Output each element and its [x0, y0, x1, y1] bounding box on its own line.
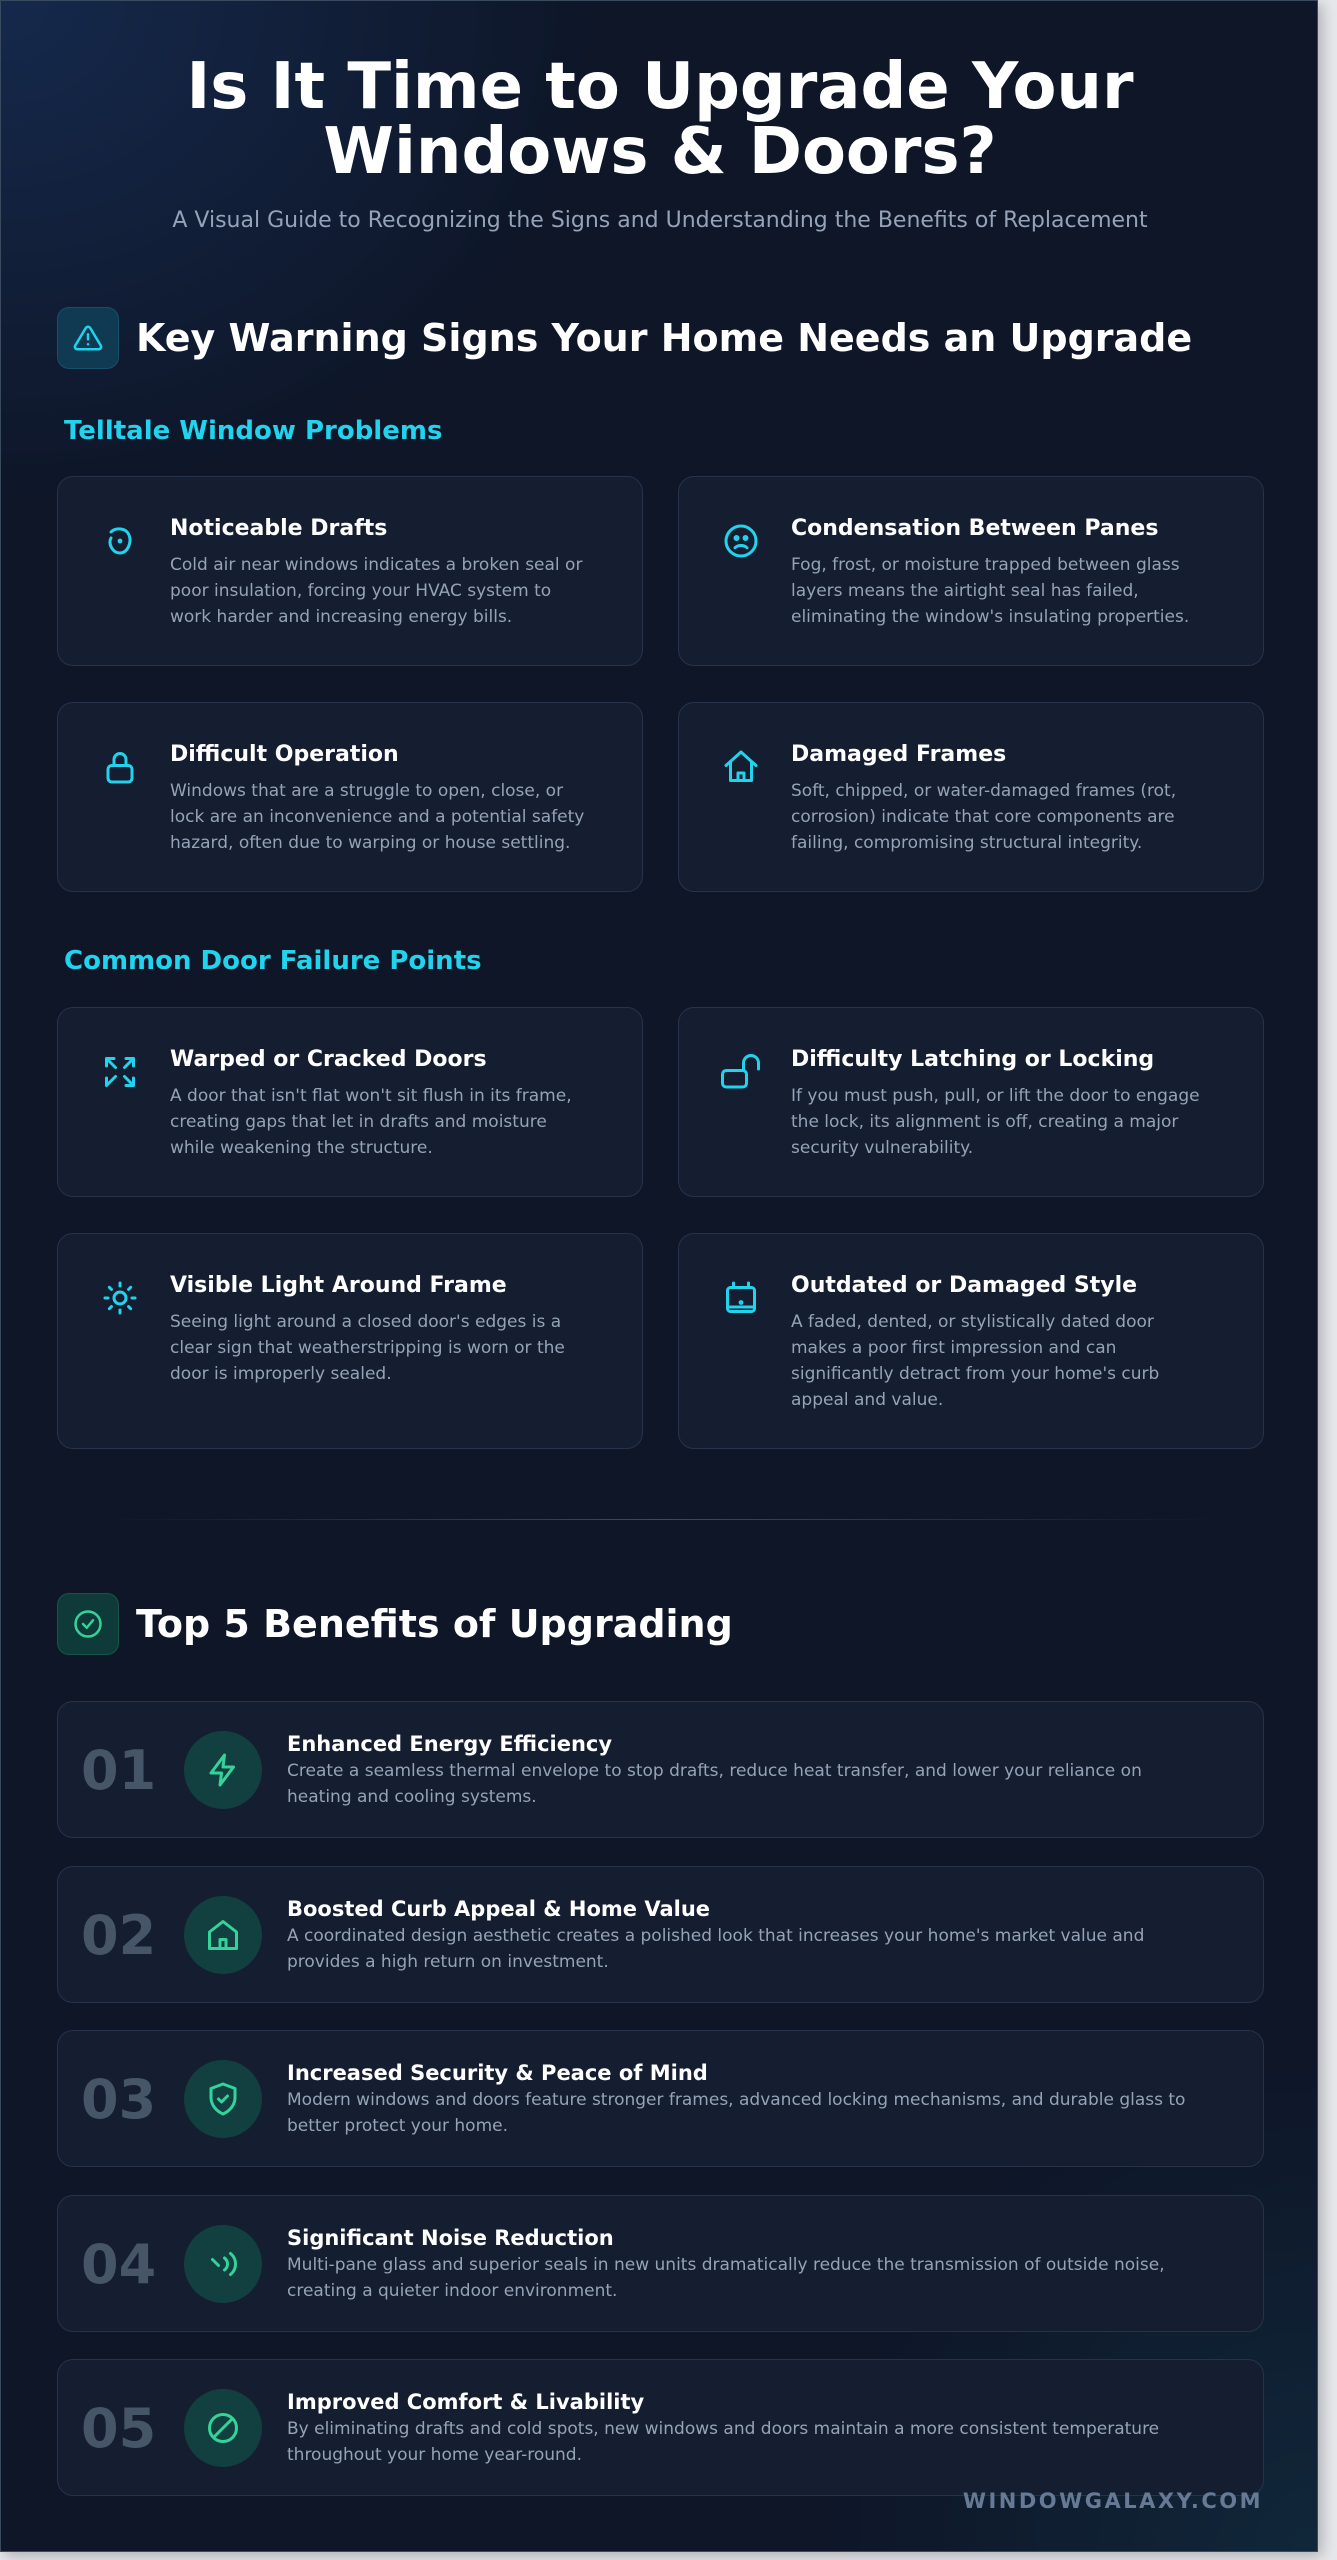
- benefit 5: [57, 2359, 1264, 2496]
- card: outdated style: [678, 1233, 1264, 1449]
- card: condensation: eliminating the window's insulating properties.: [791, 607, 1189, 627]
- card: outdated style: Outdated or Damaged Style: [791, 1273, 1137, 1298]
- card: drafts: poor insulation, forcing your HVAC system to: [170, 581, 551, 601]
- card: warped doors: [57, 1007, 643, 1197]
- benefit 4: [57, 2195, 1264, 2332]
- card: damaged frames: Damaged Frames: [791, 742, 1006, 767]
- card: light around frame: door is improperly sealed.: [170, 1364, 392, 1384]
- card: condensation: [678, 476, 1264, 666]
- card: damaged frames: [678, 702, 1264, 892]
- icon: shield: [184, 2060, 262, 2138]
- card: latching: the lock, its alignment is off, creating a major: [791, 1112, 1178, 1132]
- card: warped doors: creating gaps that let in drafts and moisture: [170, 1112, 547, 1132]
- card: latching: [678, 1007, 1264, 1197]
- benefit 5: Improved Comfort & Livability: [287, 2390, 644, 2414]
- icon: warning header: [57, 307, 119, 369]
- subtitle: A Visual Guide to Recognizing the Signs and Understanding the Benefits of Replacement: [172, 208, 1148, 233]
- title: Windows & Doors?: [323, 115, 997, 189]
- benefit 4: Multi-pane glass and superior seals in new units dramatically reduce the transmission of outside noise, creating a quieter indoor environment.: [287, 2255, 1165, 2301]
- card: condensation: Fog, frost, or moisture trapped between glass: [791, 555, 1180, 575]
- heading: benefits: Top 5 Benefits of Upgrading: [136, 1602, 733, 1646]
- icon: home: [184, 1896, 262, 1974]
- card: difficult operation: hazard, often due to warping or house settling.: [170, 833, 570, 853]
- benefit 3: 03: [81, 2068, 156, 2131]
- card: condensation: layers means the airtight seal has failed,: [791, 581, 1139, 601]
- card: damaged frames: failing, compromising structural integrity.: [791, 833, 1142, 853]
- benefit 1: Enhanced Energy Efficiency: [287, 1732, 612, 1756]
- benefit 3: Modern windows and doors feature stronger frames, advanced locking mechanisms, and durable glass to better protect your home.: [287, 2090, 1185, 2136]
- title: Is It Time to Upgrade Your: [186, 50, 1134, 124]
- watermark: WINDOWGALAXY.COM: [963, 2489, 1263, 2513]
- card: drafts: Noticeable Drafts: [170, 516, 387, 541]
- icon: open lock: [721, 1054, 760, 1088]
- subheading: window problems: Telltale Window Problems: [64, 416, 442, 446]
- card: warped doors: A door that isn't flat won't sit flush in its frame,: [170, 1086, 572, 1106]
- icon: lock: [106, 752, 134, 784]
- card: outdated style: makes a poor first impression and can: [791, 1338, 1116, 1358]
- icon: door panel: [726, 1282, 756, 1313]
- benefit 2: [57, 1866, 1264, 2003]
- heading: warning signs: Key Warning Signs Your Home Needs an Upgrade: [136, 316, 1192, 360]
- card: outdated style: significantly detract from your home's curb: [791, 1364, 1159, 1384]
- card: drafts: [57, 476, 643, 666]
- benefit 5: By eliminating drafts and cold spots, new windows and doors maintain a more consistent temperature throughout your home year-round.: [287, 2419, 1159, 2465]
- card: light around frame: [57, 1233, 643, 1449]
- icon: house: [724, 750, 758, 782]
- benefit 4: Significant Noise Reduction: [287, 2226, 614, 2250]
- benefit 1: [57, 1701, 1264, 1838]
- card: warped doors: while weakening the structure.: [170, 1138, 433, 1158]
- card: damaged frames: Soft, chipped, or water-damaged frames (rot,: [791, 781, 1176, 801]
- card: outdated style: A faded, dented, or stylistically dated door: [791, 1312, 1154, 1332]
- card: light around frame: clear sign that weatherstripping is worn or the: [170, 1338, 565, 1358]
- card: warped doors: Warped or Cracked Doors: [170, 1047, 487, 1072]
- icon: warp arrows: [104, 1056, 136, 1088]
- card: difficult operation: Difficult Operation: [170, 742, 399, 767]
- benefit 1: 01: [81, 1739, 156, 1802]
- card: light around frame: Seeing light around a closed door's edges is a: [170, 1312, 561, 1332]
- card: condensation: Condensation Between Panes: [791, 516, 1158, 541]
- benefit 4: 04: [81, 2233, 156, 2296]
- benefit 3: Increased Security & Peace of Mind: [287, 2061, 708, 2085]
- benefit 2: Boosted Curb Appeal & Home Value: [287, 1897, 710, 1921]
- icon: zap: [184, 1731, 262, 1809]
- card: latching: If you must push, pull, or lift the door to engage: [791, 1086, 1200, 1106]
- card: latching: security vulnerability.: [791, 1138, 973, 1158]
- benefit 1: Create a seamless thermal envelope to stop drafts, reduce heat transfer, and lower your reliance on heating and cooling systems.: [287, 1761, 1142, 1807]
- icon: noise: [184, 2225, 262, 2303]
- icon: sun: [104, 1282, 136, 1314]
- benefit 2: 02: [81, 1904, 156, 1967]
- card: difficult operation: [57, 702, 643, 892]
- card: outdated style: appeal and value.: [791, 1390, 943, 1410]
- benefit 2: A coordinated design aesthetic creates a polished look that increases your home's market value and provides a high return on investment.: [287, 1926, 1144, 1972]
- card: light around frame: Visible Light Around Frame: [170, 1273, 507, 1298]
- icon: ban: [184, 2389, 262, 2467]
- title: [186, 50, 1134, 189]
- icon: benefits header: [57, 1593, 119, 1655]
- card: difficult operation: Windows that are a struggle to open, close, or: [170, 781, 563, 801]
- subheading: door failures: Common Door Failure Points: [64, 946, 482, 976]
- card: drafts: work harder and increasing energy bills.: [170, 607, 512, 627]
- card: damaged frames: corrosion) indicate that core components are: [791, 807, 1175, 827]
- icon: drafts: [108, 527, 132, 554]
- icon: condensation: [724, 524, 758, 558]
- card: latching: Difficulty Latching or Locking: [791, 1047, 1154, 1072]
- benefit 3: [57, 2030, 1264, 2167]
- card: drafts: Cold air near windows indicates a broken seal or: [170, 555, 582, 575]
- benefit 5: 05: [81, 2397, 156, 2460]
- card: difficult operation: lock are an inconvenience and a potential safety: [170, 807, 584, 827]
